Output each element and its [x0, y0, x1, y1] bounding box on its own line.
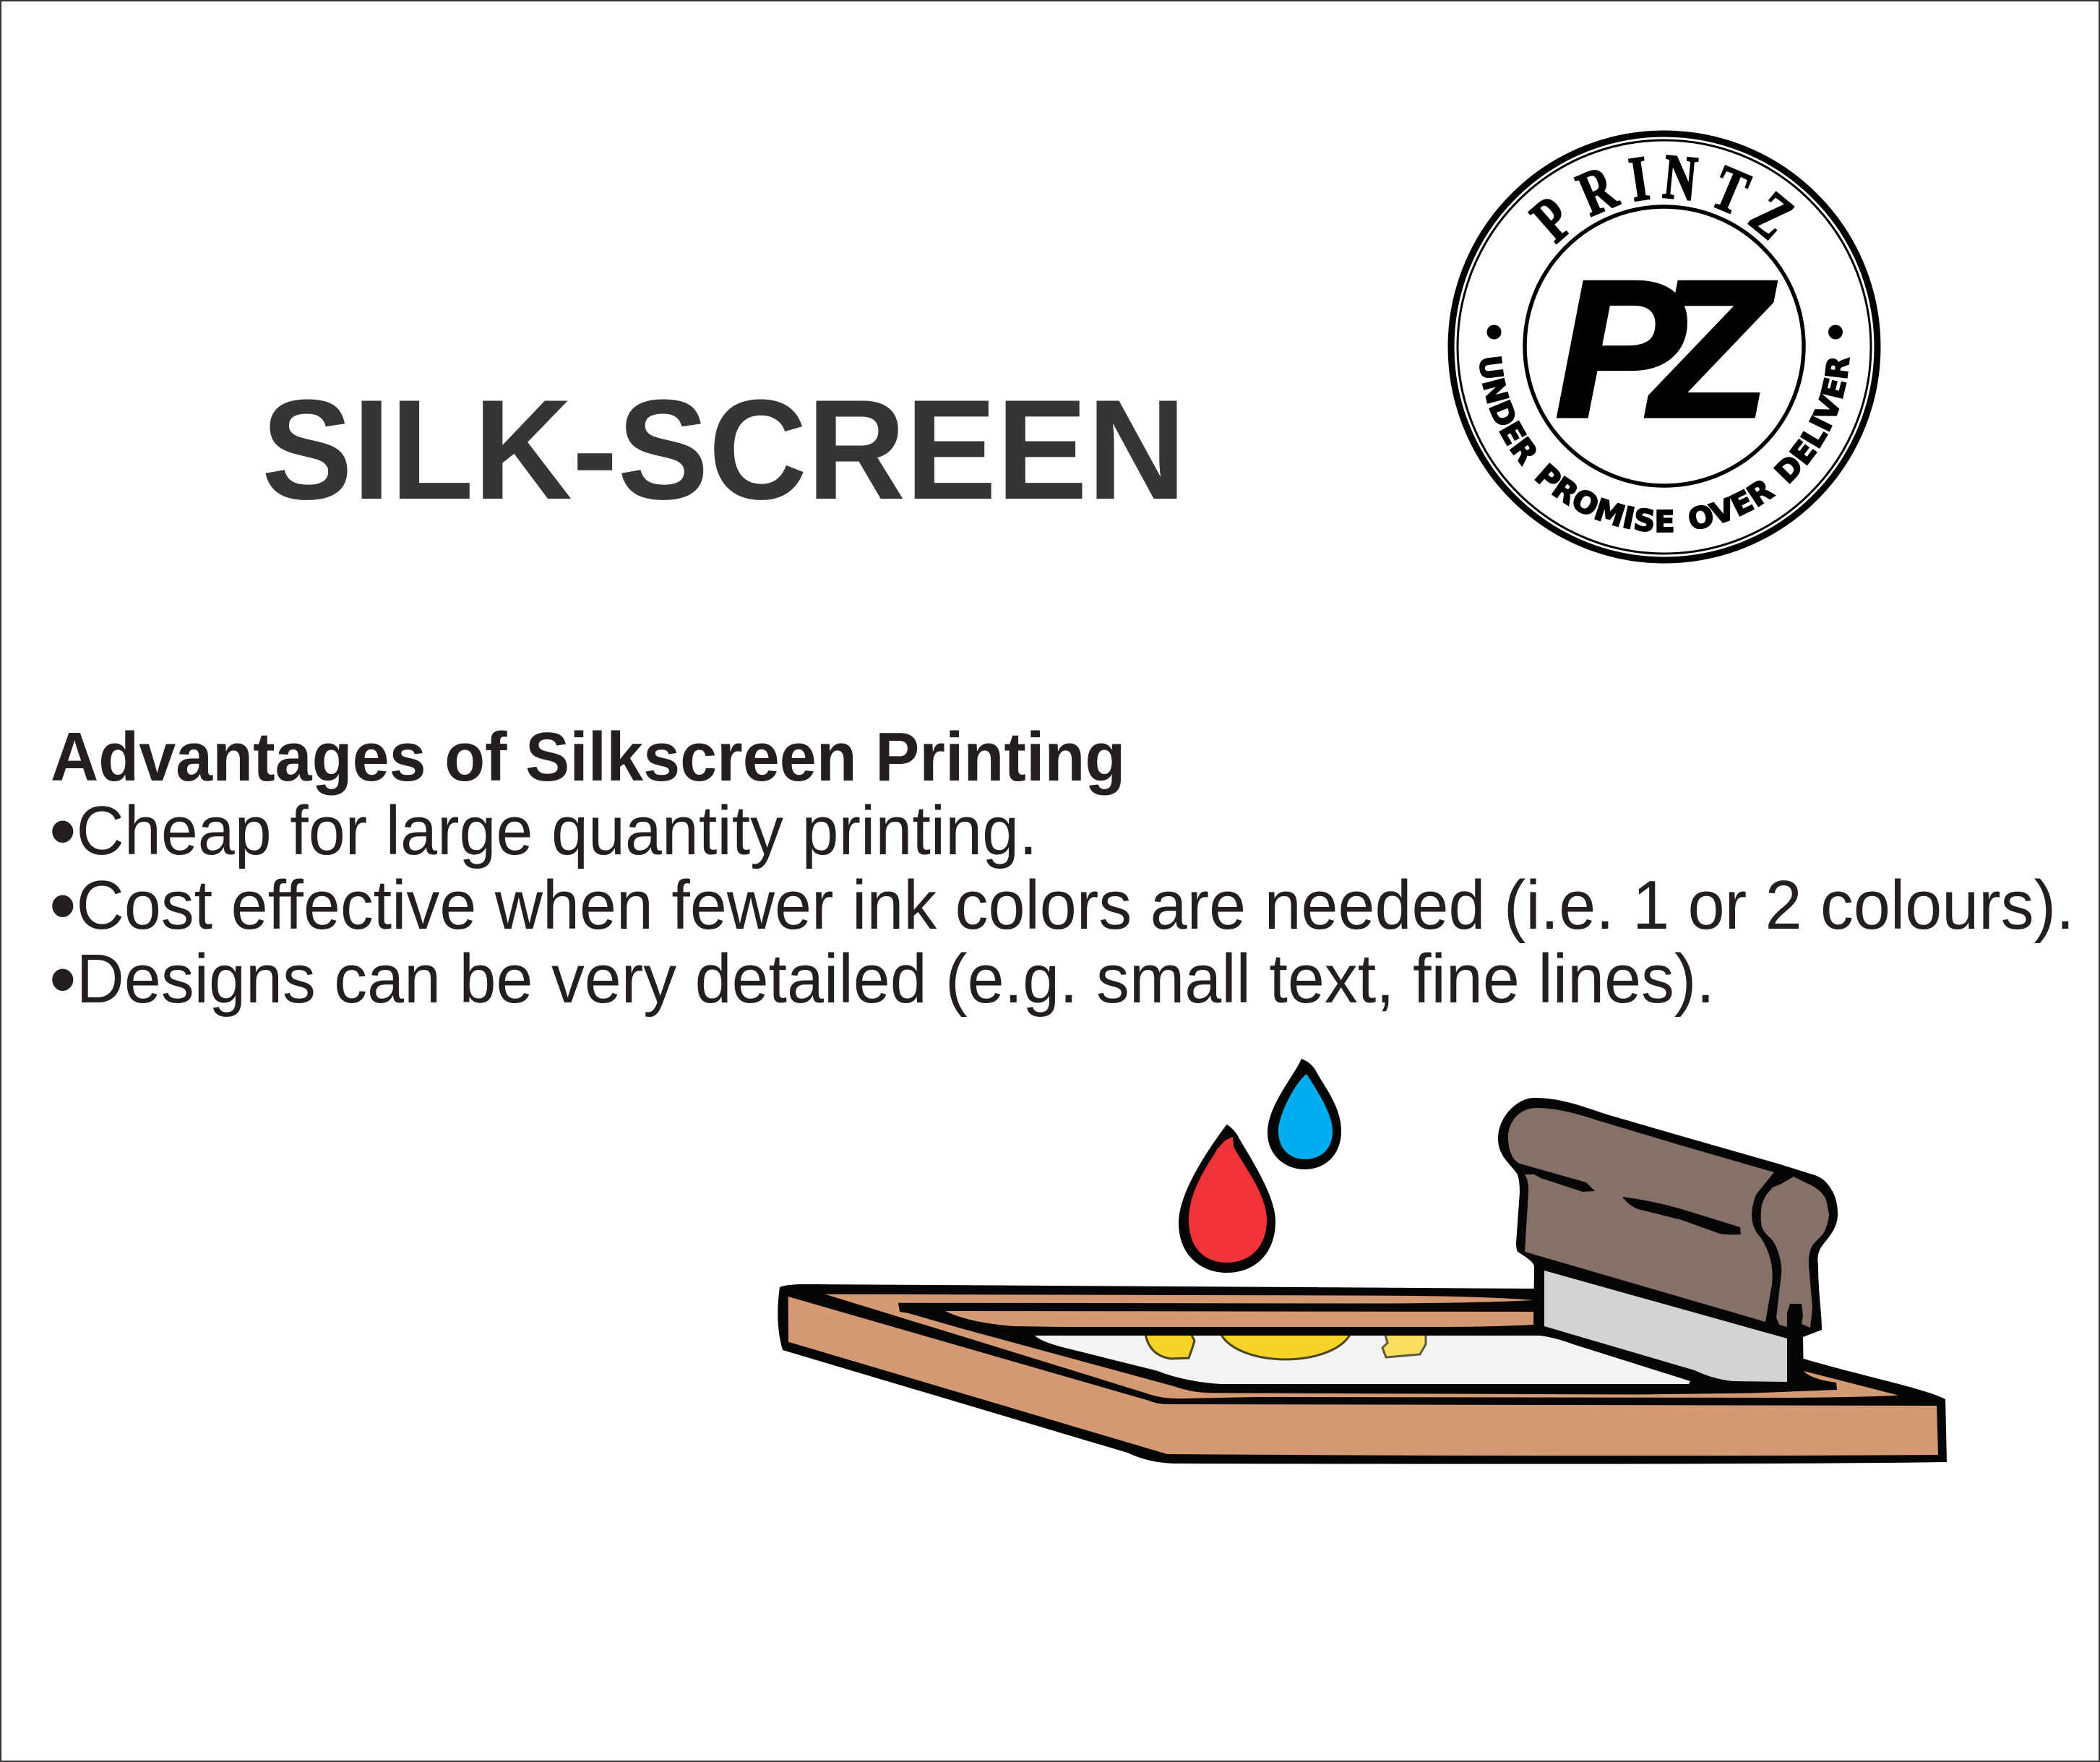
logo: left dot [1487, 325, 1502, 340]
logo: PRINTZ arc lettering: R [1568, 152, 1627, 230]
logo: Printz round badge [1448, 130, 1880, 564]
logo: tagline arc lettering: UNDER PROMISE OVER DELIVER [1479, 356, 1850, 533]
bullet: cheap: Cheap for large quantity printing. [77, 791, 1038, 869]
heading: advantages: Advantages of Silkscreen Printing [51, 718, 1125, 795]
bullet: cheap: • [49, 786, 77, 876]
frame: inner rim [945, 1311, 1534, 1327]
bullet: detailed designs: • [49, 934, 77, 1024]
logo: PRINTZ arc lettering: N [1661, 141, 1700, 214]
text block: advantages [49, 718, 2075, 1024]
bullet: detailed designs: Designs can be very detailed (e.g. small text, fine lines). [77, 940, 1715, 1017]
squeegee: handle groove left [1520, 1164, 1595, 1192]
frame: front face [788, 1297, 1938, 1456]
icon: blue ink drop [1268, 1059, 1341, 1169]
logo: PRINTZ arc lettering: I [1625, 142, 1653, 215]
logo: PRINTZ arc lettering: T [1703, 152, 1758, 229]
bullet: cost effective: Cost effective when fewer ink colors are needed (i.e. 1 or 2 colours). [77, 866, 2075, 943]
illustration: screen printing frame [778, 1284, 1947, 1464]
squeegee: metal blade [1544, 1271, 1787, 1382]
logo: PRINTZ arc lettering: P [1518, 184, 1585, 255]
title: SILK-SCREEN [262, 369, 1186, 529]
squeegee: handle end cap [1761, 1177, 1829, 1328]
frame: printed sheet with yellow artwork [1035, 1336, 1690, 1384]
frame: top rim [825, 1294, 1898, 1398]
squeegee: handle groove right [1622, 1197, 1741, 1234]
logo: right dot [1828, 325, 1843, 340]
icon: red ink drop [1179, 1125, 1275, 1273]
bullet: cost effective: • [49, 861, 77, 950]
logo: PZ monogram [1555, 241, 1778, 458]
illustration: squeegee [1498, 1098, 1838, 1386]
logo: PZ monogram: P [1555, 241, 1686, 458]
logo: PRINTZ arc lettering [1518, 141, 1806, 255]
logo: PZ monogram: Z [1645, 241, 1778, 458]
logo: PRINTZ arc lettering: Z [1738, 179, 1806, 252]
squeegee: handle body [1508, 1108, 1774, 1322]
